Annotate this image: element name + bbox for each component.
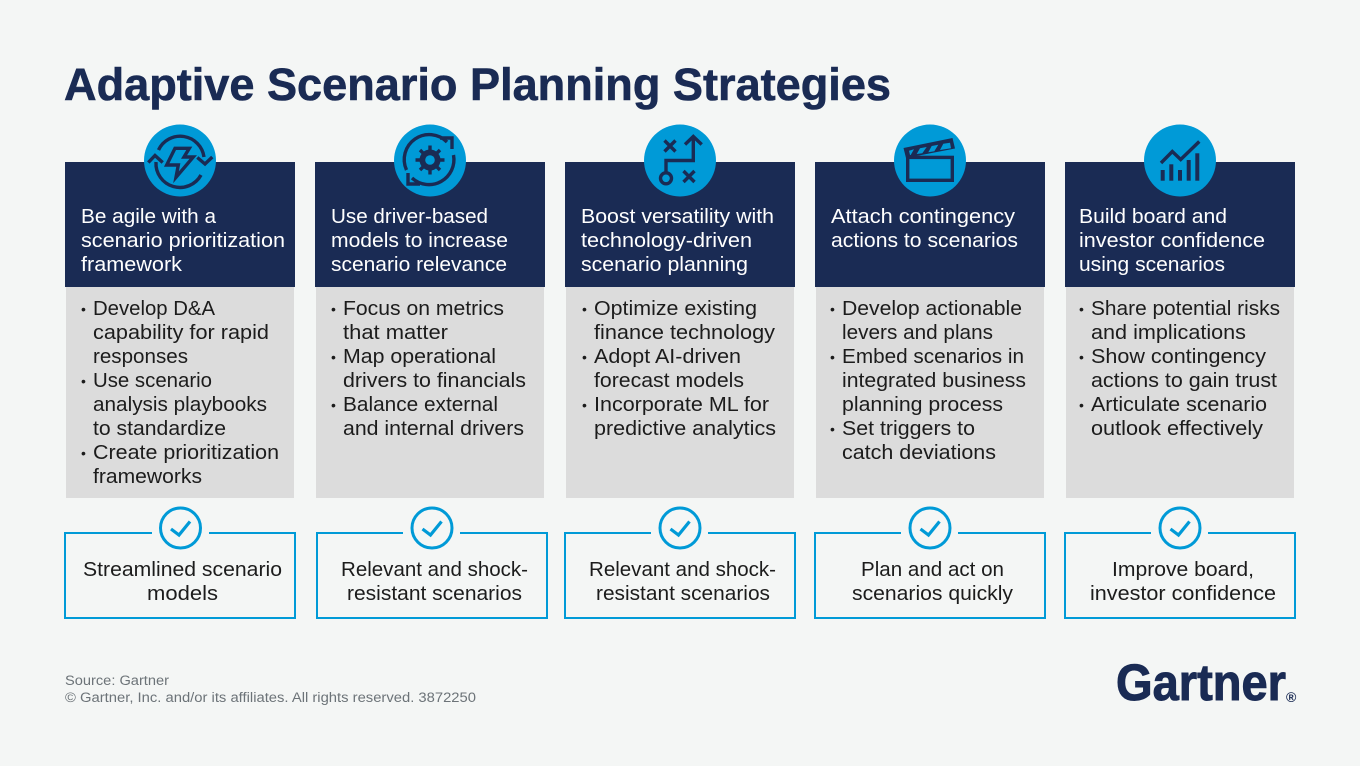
outcome box: column 3: Relevant and shock- (589, 558, 776, 581)
source note (65, 673, 476, 705)
source note: © Gartner, Inc. and/or its affiliates. All rights reserved. 3872250 (65, 690, 476, 705)
bullet list: column 1: • (81, 373, 86, 389)
bullet list: column 5: and implications (1091, 321, 1246, 344)
header bar: column 3 (565, 162, 795, 287)
bullet list: column 2: • (331, 397, 336, 413)
outcome box: column 5 (1065, 508, 1295, 618)
panel: column 4 contingency actions (815, 124, 1045, 618)
source note: Source: Gartner (65, 673, 170, 688)
icon: play diagram (644, 124, 716, 196)
bullet list: column 3: • (582, 349, 587, 365)
bullet list: column 2: Map operational (343, 345, 496, 368)
heading: column 1 (81, 205, 285, 276)
bullet list: column 1: to standardize (93, 417, 226, 440)
heading: column 2: Use driver-based (331, 205, 488, 228)
heading: column 4: Attach contingency (831, 205, 1016, 228)
icon: clapperboard (894, 124, 966, 196)
outcome box: column 5: Improve board, (1112, 558, 1254, 581)
outcome box: column 1: Streamlined scenario (83, 558, 282, 581)
bullet list: column 3 (566, 287, 794, 498)
heading: column 2: models to increase (331, 229, 508, 252)
bullet list: column 3: • (582, 301, 587, 317)
heading: column 1: Be agile with a (81, 205, 217, 228)
heading: column 3 (581, 205, 774, 276)
heading: column 1: framework (81, 253, 183, 276)
bullet list: column 2 (316, 287, 544, 498)
heading: column 5: investor confidence (1079, 229, 1265, 252)
outcome box: column 1: models (147, 582, 218, 605)
bullet list: column 4: integrated business (842, 369, 1026, 392)
bullet list: column 3: Optimize existing (594, 297, 757, 320)
bullet list: column 1: analysis playbooks (93, 393, 267, 416)
bullet list: column 5: actions to gain trust (1091, 369, 1277, 392)
heading: column 5 (1079, 205, 1265, 276)
bullet list: column 3: • (582, 397, 587, 413)
outcome box: column 1 (65, 508, 295, 618)
panel: column 2 driver-based models (315, 124, 547, 618)
panel: column 5 board and investor confidence (1065, 124, 1295, 618)
bullet list: column 1: capability for rapid (93, 321, 269, 344)
bullet list: column 3: Adopt AI-driven (594, 345, 741, 368)
heading: column 2 (331, 205, 508, 276)
bullet list: column 1: frameworks (93, 465, 202, 488)
outcome box: column 4 (815, 508, 1045, 618)
icon: cycle with gear (394, 124, 466, 196)
bullet list: column 1: • (81, 301, 86, 317)
logo: Gartner: Gartner (1116, 654, 1286, 711)
bullet list: column 5: • (1079, 349, 1084, 365)
header bar: column 4 (815, 162, 1045, 287)
outcome box: column 2: Relevant and shock- (341, 558, 528, 581)
bullet list: column 4 (816, 287, 1044, 498)
icon: cycle with lightning bolt (144, 124, 216, 196)
bullet list: column 5: • (1079, 397, 1084, 413)
bullet list: column 3: forecast models (594, 369, 744, 392)
bullet list: column 5 (1066, 287, 1294, 498)
outcome box: column 4: Plan and act on (861, 558, 1004, 581)
bullet list: column 1: • (81, 445, 86, 461)
outcome box: column 3 (565, 508, 795, 618)
icon: bar chart with trend line (1144, 124, 1216, 196)
heading: column 4 (831, 205, 1018, 252)
heading: column 3: Boost versatility with (581, 205, 774, 228)
heading: column 5: using scenarios (1079, 253, 1225, 276)
panel: column 1 agile prioritization (65, 124, 295, 618)
bullet list: column 1: Create prioritization (93, 441, 279, 464)
bullet list: column 4: Set triggers to (842, 417, 975, 440)
header bar: column 1 (65, 162, 295, 287)
heading: column 2: scenario relevance (331, 253, 507, 276)
header bar: column 5 (1065, 162, 1295, 287)
bullet list: column 2: • (331, 349, 336, 365)
bullet list: column 2: Focus on metrics (343, 297, 504, 320)
bullet list: column 3: predictive analytics (594, 417, 776, 440)
bullet list: column 4: planning process (842, 393, 1003, 416)
bullet list: column 2: and internal drivers (343, 417, 524, 440)
heading: column 3: scenario planning (581, 253, 748, 276)
bullet list: column 4: Embed scenarios in (842, 345, 1024, 368)
bullet list: column 3: Incorporate ML for (594, 393, 769, 416)
heading: column 4: actions to scenarios (831, 229, 1018, 252)
bullet list: column 4: • (830, 421, 835, 437)
bullet list: column 3: finance technology (594, 321, 776, 344)
bullet list: column 4: • (830, 301, 835, 317)
logo: Gartner: ® (1286, 689, 1297, 705)
bullet list: column 5: Show contingency (1091, 345, 1267, 368)
outcome box: column 2: resistant scenarios (347, 582, 522, 605)
bullet list: column 5: outlook effectively (1091, 417, 1264, 440)
outcome box: column 2 (317, 508, 547, 618)
bullet list: column 2: that matter (343, 321, 448, 344)
header bar: column 2 (315, 162, 545, 287)
bullet list: column 5: Share potential risks (1091, 297, 1280, 320)
outcome box: column 4: scenarios quickly (852, 582, 1014, 605)
heading: column 1: scenario prioritization (81, 229, 285, 252)
bullet list: column 1 (66, 287, 294, 498)
bullet list: column 4: catch deviations (842, 441, 996, 464)
bullet list: column 4: levers and plans (842, 321, 993, 344)
bullet list: column 1: Use scenario (93, 369, 212, 392)
bullet list: column 5: • (1079, 301, 1084, 317)
bullet list: column 2: drivers to financials (343, 369, 526, 392)
bullet list: column 4: • (830, 349, 835, 365)
panel: column 3 technology-driven planning (565, 124, 795, 618)
outcome box: column 5: investor confidence (1090, 582, 1276, 605)
bullet list: column 4: Develop actionable (842, 297, 1022, 320)
heading: column 3: technology-driven (581, 229, 752, 252)
bullet list: column 1: Develop D&A (93, 297, 215, 320)
bullet list: column 5: Articulate scenario (1091, 393, 1267, 416)
bullet list: column 2: • (331, 301, 336, 317)
bullet list: column 1: responses (93, 345, 188, 368)
outcome box: column 3: resistant scenarios (596, 582, 770, 605)
heading: column 5: Build board and (1079, 205, 1227, 228)
bullet list: column 2: Balance external (343, 393, 498, 416)
title: Adaptive Scenario Planning Strategies (64, 59, 891, 110)
